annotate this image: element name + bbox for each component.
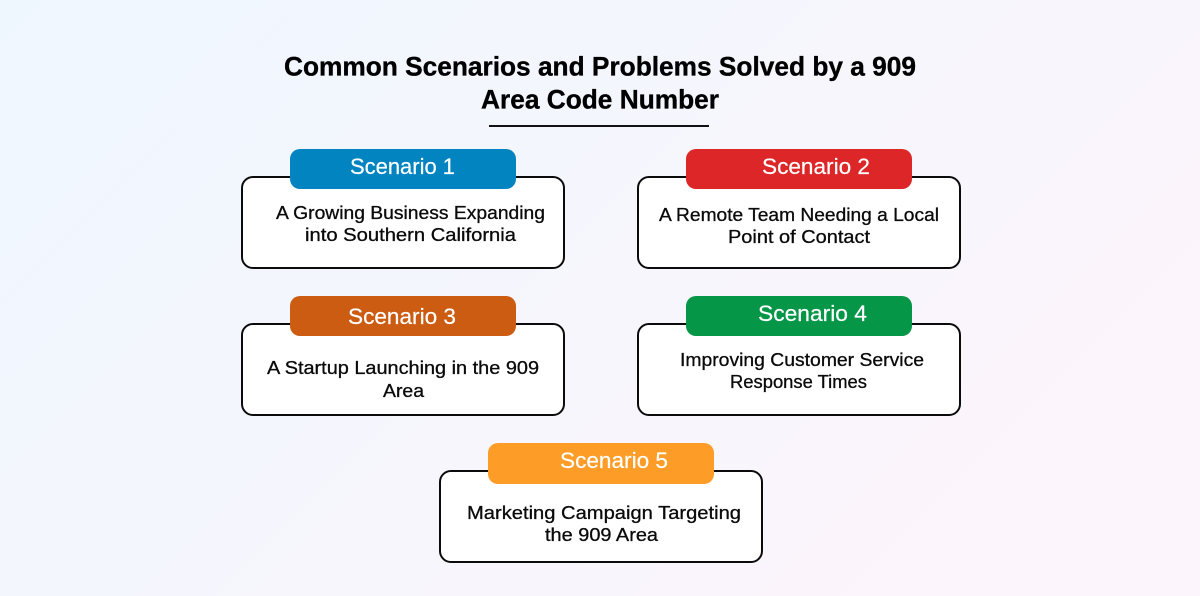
panel: scenario 1 <box>242 149 564 268</box>
badge: scenario 3: Scenario 3 <box>348 304 456 329</box>
badge: scenario 1: Scenario 1 <box>350 154 455 179</box>
card: scenario 5 description <box>440 471 762 562</box>
panel: scenario 5 <box>440 443 762 562</box>
title underline <box>489 125 709 127</box>
panel: scenario 3 <box>242 296 564 415</box>
card: scenario 3 description: Area <box>383 380 425 401</box>
card: scenario 1 description <box>242 177 564 268</box>
card: scenario 4 description <box>638 324 960 415</box>
title: Area Code Number <box>481 84 719 114</box>
panel: scenario 4 <box>638 296 960 415</box>
card: scenario 1 description: into Southern California <box>305 224 517 245</box>
badge: scenario 1 <box>290 149 516 189</box>
card: scenario 5 description: Marketing Campaign Targeting <box>467 502 741 523</box>
badge: scenario 3 <box>290 296 516 336</box>
title: Common Scenarios and Problems Solved by a 909 <box>284 52 916 82</box>
card: scenario 2 description: A Remote Team Needing a Local <box>659 204 939 225</box>
badge: scenario 4: Scenario 4 <box>758 301 867 326</box>
card: scenario 4 description: Improving Customer Service <box>680 349 924 370</box>
card: scenario 5 description: the 909 Area <box>545 524 659 545</box>
card: scenario 3 description <box>242 324 564 415</box>
badge: scenario 4 <box>686 296 912 336</box>
badge: scenario 5: Scenario 5 <box>560 448 668 473</box>
card: scenario 2 description: Point of Contact <box>728 226 870 247</box>
badge: scenario 2 <box>686 149 912 189</box>
card: scenario 2 description <box>638 177 960 268</box>
panel: scenario 2 <box>638 149 960 268</box>
card: scenario 4 description: Response Times <box>730 371 867 392</box>
badge: scenario 5 <box>488 443 714 484</box>
card: scenario 3 description: A Startup Launching in the 909 <box>267 357 539 378</box>
card: scenario 1 description: A Growing Business Expanding <box>276 202 545 223</box>
badge: scenario 2: Scenario 2 <box>762 154 870 179</box>
title <box>284 52 916 114</box>
